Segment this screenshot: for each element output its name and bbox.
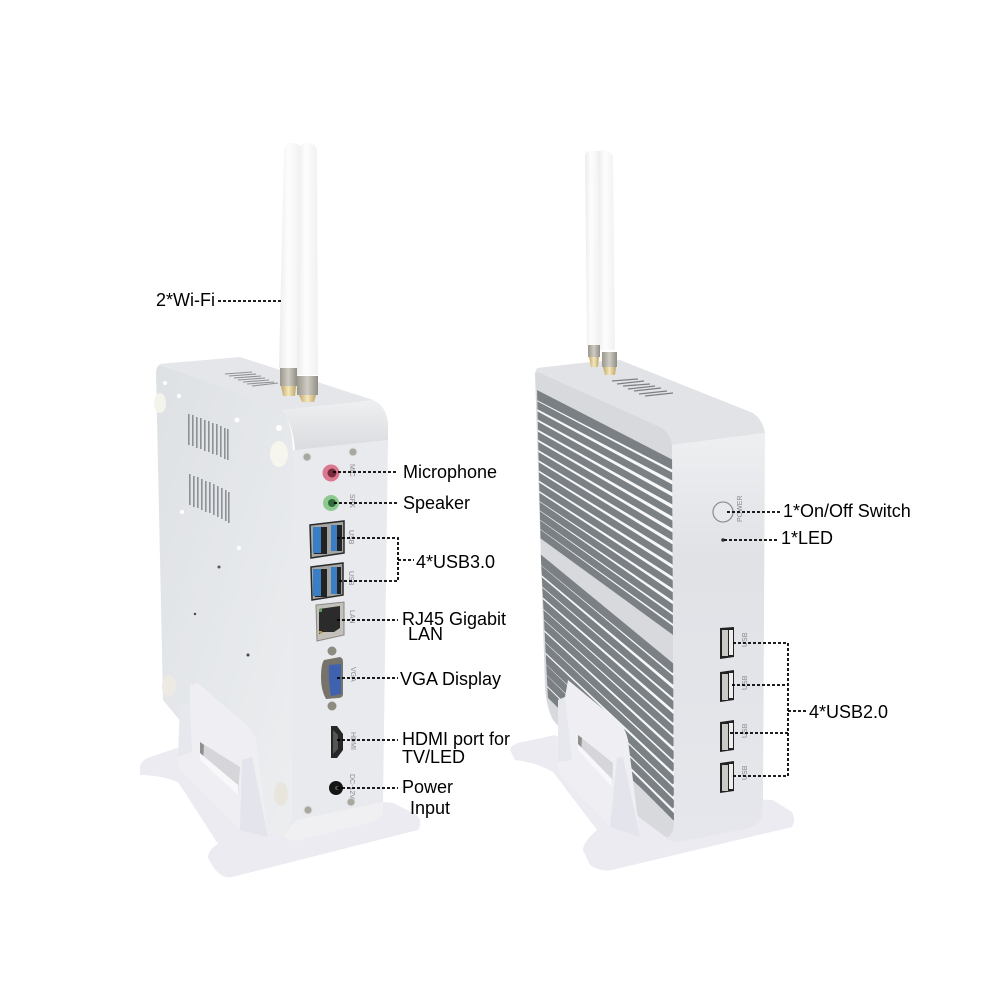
top vent (right) (612, 379, 673, 396)
callout: Wi-Fi (156, 290, 281, 310)
front legends (737, 496, 749, 780)
port: HDMI (331, 726, 343, 758)
stand base (right) (510, 735, 794, 870)
antenna connectors (left) (280, 368, 318, 402)
front legends: POWER (737, 496, 744, 522)
callout: USB 3.0 (337, 538, 495, 581)
top surface (right) (535, 360, 765, 445)
power button (713, 502, 733, 522)
callout: HDMI: TV/LED (402, 747, 465, 767)
antenna connectors (right) (588, 345, 617, 375)
callout: USB 3.0: 4*USB3.0 (416, 552, 495, 572)
port legends: LAN (348, 610, 355, 624)
callout: Speaker (334, 493, 470, 513)
side panel (156, 365, 296, 838)
callout: Microphone: Microphone (403, 462, 497, 482)
LED dot (721, 538, 725, 542)
callout: USB 2.0 (730, 643, 888, 776)
top cap (283, 400, 388, 450)
screws (303, 448, 357, 814)
callout: Wi-Fi: 2*Wi-Fi (156, 290, 215, 310)
front legends: USB (742, 675, 749, 690)
port legends: VGA (349, 667, 356, 682)
port: microphone jack (322, 464, 340, 482)
front legends: USB (742, 765, 749, 780)
port legends: DC-12V (348, 774, 355, 799)
antennas (right) (585, 150, 615, 350)
callout: RJ45 LAN: RJ45 Gigabit (402, 609, 506, 629)
callout: LED (724, 528, 833, 548)
callout: RJ45 LAN (337, 609, 506, 644)
callout: HDMI: HDMI port for (402, 729, 510, 749)
callout: Speaker: Speaker (403, 493, 470, 513)
callout: power input (337, 777, 453, 818)
callout: HDMI (337, 729, 510, 767)
bottom cap (283, 802, 383, 840)
antennas (left) (279, 143, 318, 375)
top vent (225, 372, 278, 386)
stand slot (right) (578, 735, 613, 787)
rubber feet and screw holes (154, 381, 288, 806)
upright stand (right) (558, 680, 640, 837)
left device: rear view (140, 143, 420, 877)
side vents (188, 414, 230, 523)
infographic: mini PC rear and front views (140, 144, 910, 878)
port: USB 3.0 lower (311, 563, 343, 600)
USB 2.0 ports (720, 627, 734, 793)
right buttress (right stand) (610, 757, 640, 837)
callout: VGA: VGA Display (400, 669, 501, 689)
callout: RJ45 LAN: LAN (408, 624, 443, 644)
right device: front view (510, 150, 794, 870)
port legends: SPK (348, 494, 355, 508)
callout: USB 2.0: 4*USB2.0 (809, 702, 888, 722)
port: RJ45 LAN (316, 602, 344, 641)
port: speaker jack (323, 495, 339, 511)
port legends: USB (347, 571, 354, 586)
left buttress (left stand) (178, 703, 192, 757)
callout: power input: Power (402, 777, 453, 797)
callout: LED: 1*LED (781, 528, 833, 548)
port: VGA (321, 646, 343, 710)
port legends: USB (347, 530, 354, 545)
upright stand (left) (178, 683, 268, 837)
left buttress (right stand) (558, 697, 572, 762)
port: power input (329, 781, 343, 795)
stand slot (left) (200, 742, 240, 795)
front face (283, 440, 388, 840)
callout: power input: Input (410, 798, 450, 818)
front legends: USB (742, 723, 749, 738)
fin side panel (535, 372, 674, 838)
port: USB 3.0 upper (310, 521, 344, 558)
stand base (left) (140, 748, 420, 877)
port legends: MIC (348, 464, 355, 477)
top surface (159, 357, 388, 423)
cooling fins (535, 394, 675, 822)
front legends: USB (742, 632, 749, 647)
port legends: HDMI (349, 732, 356, 750)
callout: on/off switch: 1*On/Off Switch (783, 501, 911, 521)
port legends (347, 464, 356, 799)
front face (right) (666, 433, 765, 842)
right buttress (left stand) (240, 757, 268, 837)
